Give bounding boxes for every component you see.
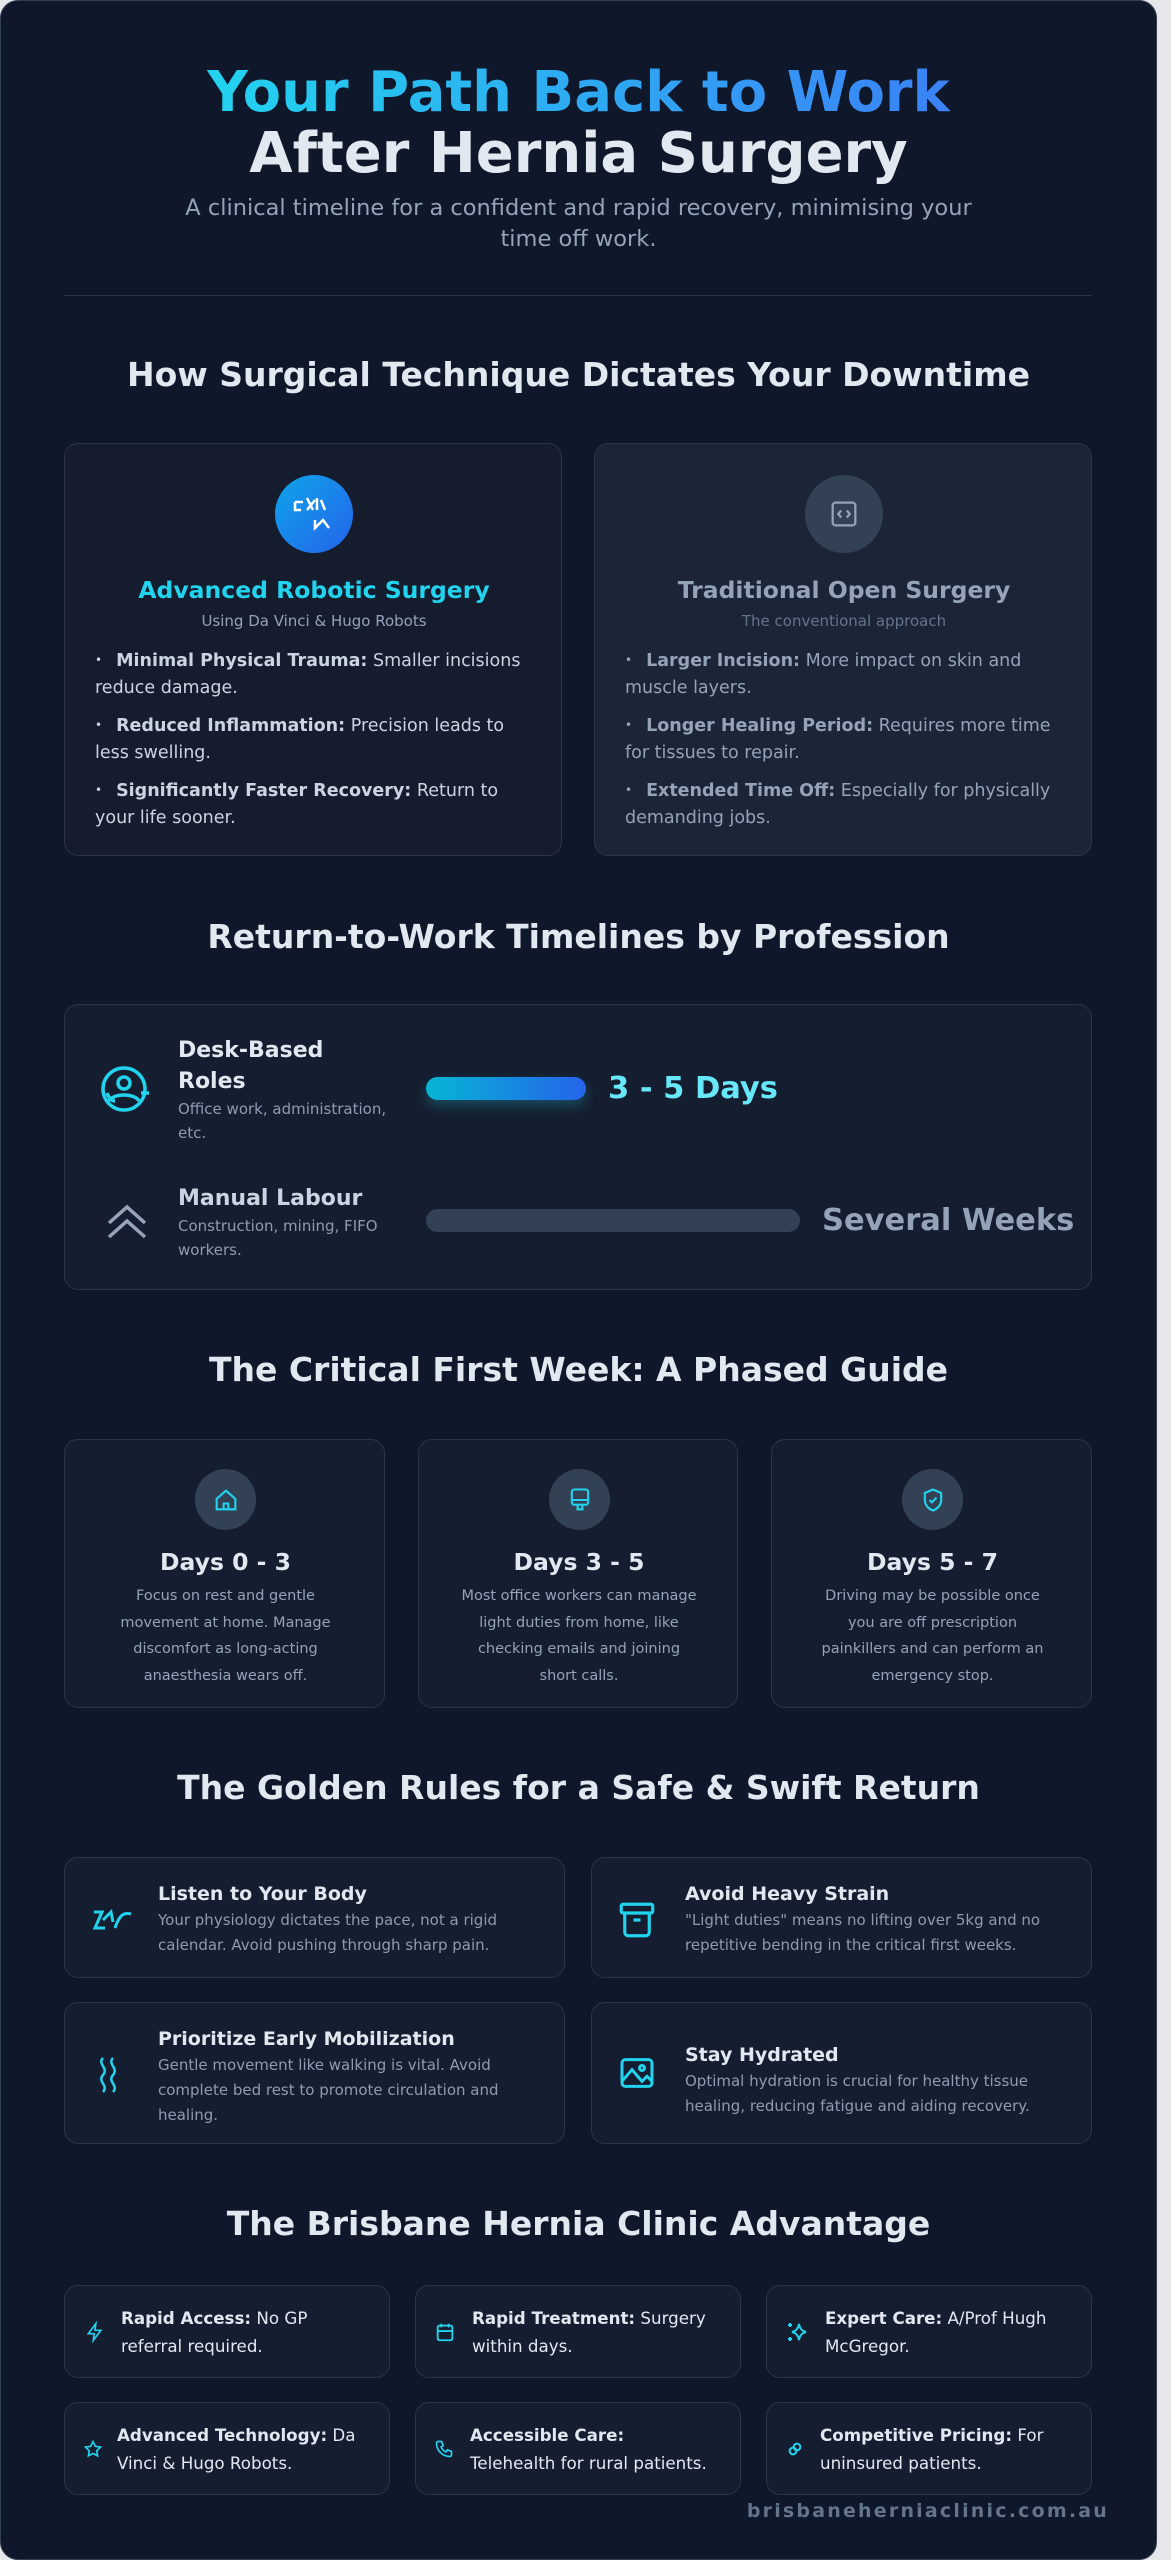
panel: mobilization: Gentle movement like walking is vital. Avoid complete bed rest to promote circulation and healing. xyxy=(158,2056,499,2124)
icon: shield xyxy=(902,1469,963,1530)
panel: mobilization xyxy=(64,2002,565,2144)
panel: days 0-3: Days 0 - 3 xyxy=(160,1548,291,1576)
panel: strain: "Light duties" means no lifting over 5kg and no repetitive bending in the critical first weeks. xyxy=(685,1911,1040,1954)
panel: open surgery: Traditional Open Surgery xyxy=(678,576,1010,604)
panel: accessible: Accessible Care: xyxy=(470,2425,624,2445)
panel: days 5-7 xyxy=(771,1439,1092,1708)
bullets xyxy=(95,651,520,828)
bullets xyxy=(625,651,1051,828)
icon: calendar xyxy=(436,2324,454,2342)
panel: days 3-5 xyxy=(418,1439,738,1708)
panel: mobilization: Prioritize Early Mobilization xyxy=(158,2028,455,2050)
icon: bolt xyxy=(86,2320,102,2344)
panel: robotic surgery xyxy=(64,443,562,856)
bullets: Larger Incision: More impact on skin and muscle layers. xyxy=(625,651,1021,698)
panel: hydrated xyxy=(591,2002,1092,2144)
subtitle: A clinical timeline for a confident and rapid recovery, minimising your xyxy=(185,195,972,221)
panel: rapid treatment: Rapid Treatment: Surgery within days. xyxy=(472,2308,706,2356)
panel: expert care: Expert Care: A/Prof Hugh McGregor. xyxy=(825,2308,1046,2356)
panel: open surgery: The conventional approach xyxy=(742,612,946,630)
panel: rapid access xyxy=(64,2285,390,2378)
panel: rapid access: Rapid Access: No GP referral required. xyxy=(121,2308,307,2356)
panel: strain xyxy=(591,1857,1092,1978)
label: desk xyxy=(178,1038,386,1142)
heading: advantage: The Brisbane Hernia Clinic Advantage xyxy=(227,2204,930,2243)
bullets: Extended Time Off: Especially for physically demanding jobs. xyxy=(625,781,1050,828)
panel: days 5-7: Driving may be possible once you are off prescription painkillers and can perform an emergency stop. xyxy=(822,1588,1043,1684)
icon: home xyxy=(195,1469,256,1530)
heading: golden rules: The Golden Rules for a Safe & Swift Return xyxy=(177,1768,980,1807)
icon: bin xyxy=(620,1902,654,1938)
icon: squiggle xyxy=(92,1909,132,1930)
panel: days 0-3: Focus on rest and gentle movement at home. Manage discomfort as long-acting anaesthesia wears off. xyxy=(120,1588,331,1684)
title: After Hernia Surgery xyxy=(249,121,908,186)
icon: image xyxy=(620,2058,654,2088)
panel: listen xyxy=(64,1857,565,1978)
panel: hydrated: Stay Hydrated xyxy=(685,2044,839,2066)
panel: pricing: Competitive Pricing: For uninsured patients. xyxy=(820,2425,1043,2473)
icon: chevrons xyxy=(108,1204,146,1238)
label: desk: Office work, administration, etc. xyxy=(178,1100,386,1142)
label: desk: Roles xyxy=(178,1069,246,1094)
panel: days 3-5: Days 3 - 5 xyxy=(514,1548,644,1576)
icon: person xyxy=(101,1066,149,1112)
panel: timelines: Several Weeks xyxy=(822,1203,1074,1238)
icon: star xyxy=(84,2440,102,2458)
panel: listen: Listen to Your Body xyxy=(158,1883,367,1905)
card title: Advanced Robotic Surgery xyxy=(138,576,490,604)
bar: desk xyxy=(426,1077,586,1100)
footer url: brisbaneherniaclinic.com.au xyxy=(747,2500,1109,2522)
panel: expert care xyxy=(766,2285,1092,2378)
panel: pricing xyxy=(766,2402,1092,2495)
heading: timelines: Return-to-Work Timelines by Profession xyxy=(207,917,950,956)
panel: technology: Advanced Technology: Da Vinci & Hugo Robots. xyxy=(117,2425,356,2473)
bullets: Minimal Physical Trauma: Smaller incisions reduce damage. xyxy=(95,651,520,698)
icon: phone xyxy=(436,2440,452,2458)
panel: robotic surgery: Using Da Vinci & Hugo Robots xyxy=(201,612,427,630)
title xyxy=(207,60,950,186)
panel: strain: Avoid Heavy Strain xyxy=(685,1883,889,1905)
label: desk: Desk-Based xyxy=(178,1038,323,1063)
panel: accessible xyxy=(415,2402,741,2495)
icon: waves xyxy=(100,2057,116,2093)
icon: sparkle xyxy=(788,2323,806,2341)
label: manual: Manual Labour xyxy=(178,1186,362,1211)
heading: first week: The Critical First Week: A Phased Guide xyxy=(209,1350,948,1389)
panel: hydrated: Optimal hydration is crucial for healthy tissue healing, reducing fatigue and aiding recovery. xyxy=(685,2072,1030,2115)
bar: manual xyxy=(426,1209,800,1232)
bullets: Reduced Inflammation: Precision leads to less swelling. xyxy=(95,716,504,763)
panel: rapid treatment xyxy=(415,2285,741,2378)
subtitle: time off work. xyxy=(500,226,656,252)
label: manual: Construction, mining, FIFO workers. xyxy=(178,1217,378,1259)
panel: days 5-7: Days 5 - 7 xyxy=(867,1548,998,1576)
panel: timelines xyxy=(64,1004,1092,1290)
label: manual xyxy=(178,1186,378,1259)
subtitle xyxy=(185,195,972,252)
icon: code box xyxy=(805,475,883,553)
panel: listen: Your physiology dictates the pace, not a rigid calendar. Avoid pushing through sharp pain. xyxy=(158,1911,497,1954)
panel: technology xyxy=(64,2402,390,2495)
panel: days 3-5: Most office workers can manage light duties from home, like checking emails and joining short calls. xyxy=(461,1588,697,1684)
icon: coins xyxy=(788,2442,802,2456)
panel: open surgery xyxy=(594,443,1092,856)
bullets: Significantly Faster Recovery: Return to your life sooner. xyxy=(95,781,498,828)
panel: accessible: Telehealth for rural patients. xyxy=(470,2453,707,2473)
panel: timelines: 3 - 5 Days xyxy=(608,1071,778,1106)
icon: robot xyxy=(275,475,353,553)
bullets: Longer Healing Period: Requires more time for tissues to repair. xyxy=(625,716,1051,763)
icon: monitor xyxy=(549,1469,610,1530)
heading: surgical technique: How Surgical Technique Dictates Your Downtime xyxy=(127,355,1030,394)
title: Your Path Back to Work xyxy=(207,60,950,125)
panel: days 0-3 xyxy=(64,1439,385,1708)
